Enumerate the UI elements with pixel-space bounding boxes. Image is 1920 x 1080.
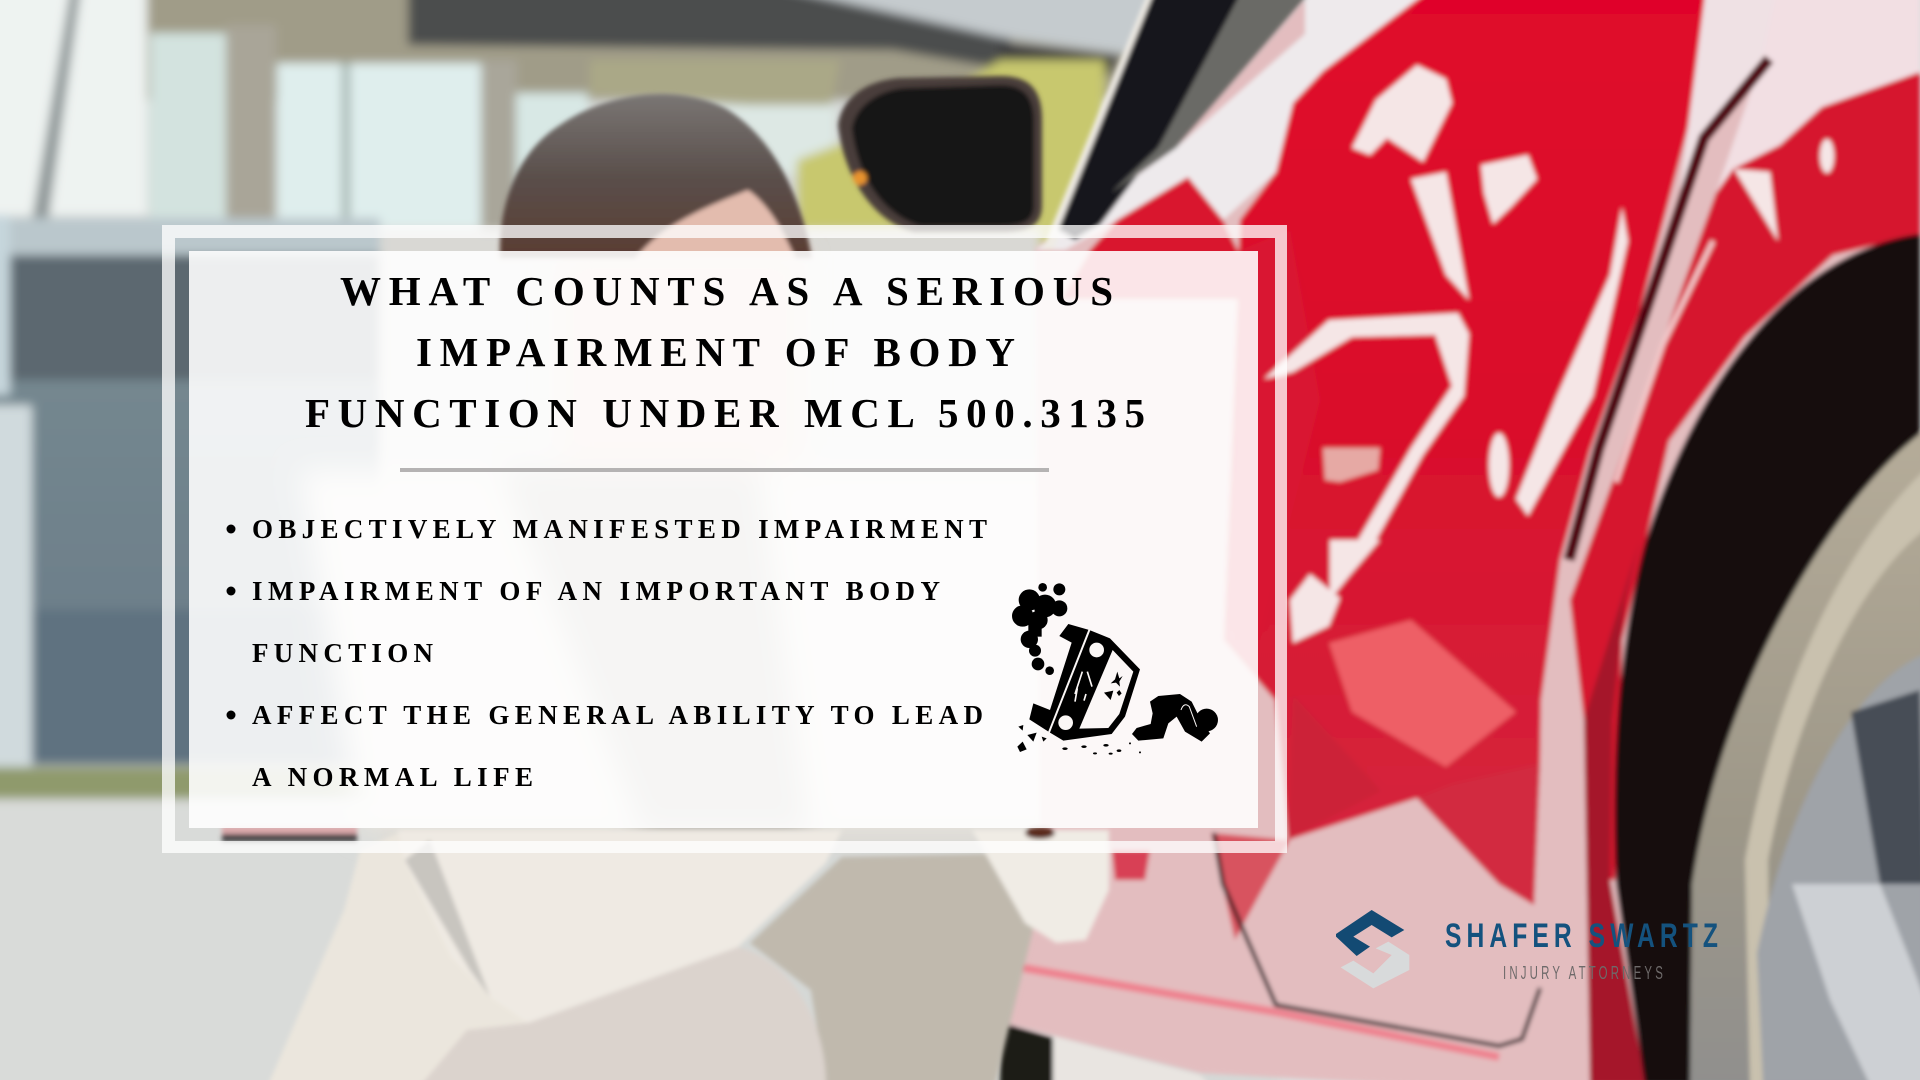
panel: translucent white card (162, 225, 1287, 853)
bullet 3 (226, 700, 983, 792)
logo mark (1336, 910, 1409, 988)
bullet 2: IMPAIRMENT OF AN IMPORTANT BODY (252, 576, 940, 606)
woman: hair and face (500, 94, 812, 258)
bullet 3: A NORMAL LIFE (252, 762, 533, 792)
divider rule (400, 468, 1049, 472)
woman: cardigan, trousers and sleeve (222, 826, 1109, 1080)
bullet 2: FUNCTION (252, 638, 434, 668)
mirror (838, 76, 1042, 232)
company name: SHAFER SWARTZ (1445, 917, 1723, 955)
car (1029, 624, 1140, 741)
title: IMPAIRMENT OF BODY (416, 329, 1015, 375)
background building (0, 0, 1280, 1080)
debris (1017, 725, 1141, 755)
wheel (1584, 540, 1646, 1080)
frame band (162, 225, 1287, 853)
red fender (1223, 0, 1705, 905)
inner white panel (189, 251, 1258, 828)
title: FUNCTION UNDER MCL 500.3135 (305, 390, 1145, 436)
bullet 3: AFFECT THE GENERAL ABILITY TO LEAD (252, 700, 983, 730)
bullet list (226, 514, 987, 792)
bullet 2 (226, 576, 940, 668)
bullet 1: OBJECTIVELY MANIFESTED IMPAIRMENT (252, 514, 987, 544)
icon: overturned car with injured person (1012, 583, 1218, 755)
title (305, 268, 1145, 436)
woman: body under panel (300, 255, 1110, 830)
dent and lower panel (1329, 620, 1516, 767)
tagline: INJURY ATTORNEYS (1503, 963, 1666, 983)
smoke (1012, 583, 1067, 675)
car (838, 0, 1920, 1080)
scratches (1264, 65, 1834, 643)
title: WHAT COUNTS AS A SERIOUS (340, 268, 1113, 314)
injured person (1132, 694, 1218, 742)
